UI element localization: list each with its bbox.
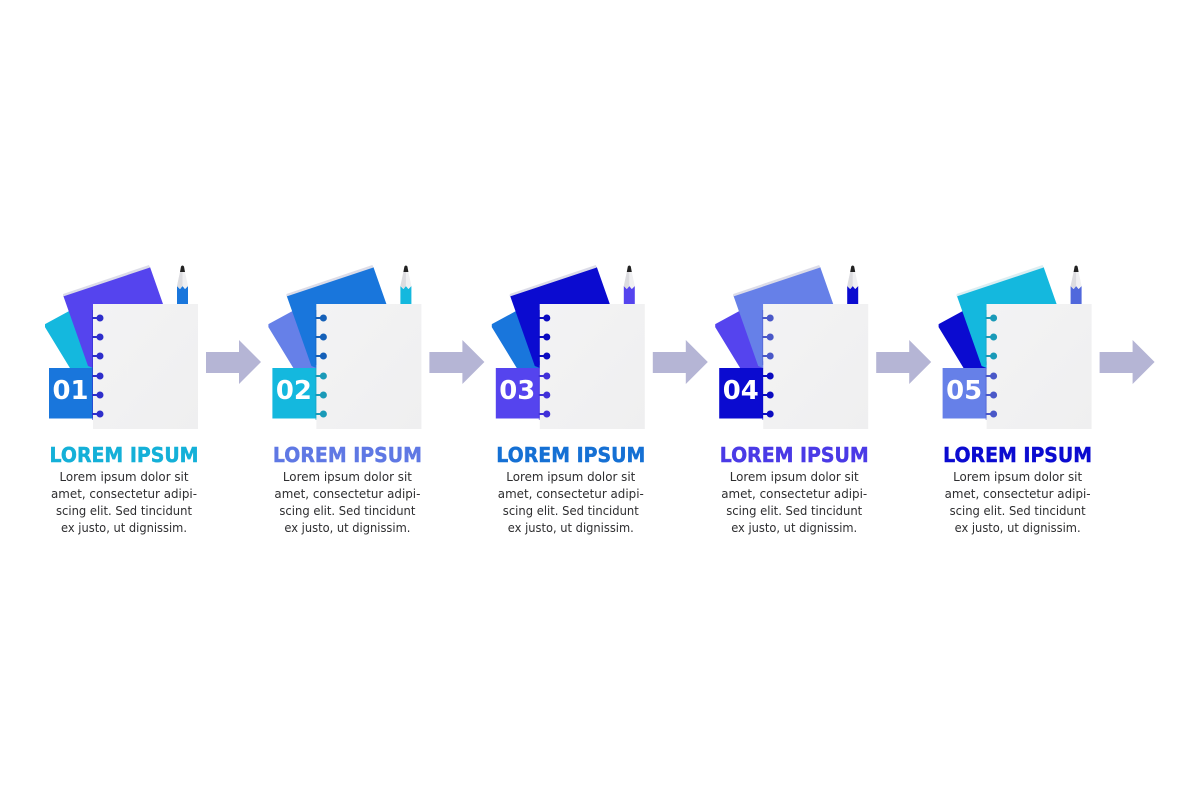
number badge (496, 368, 540, 418)
spiral binding (315, 310, 326, 420)
heading: LOREM IPSUM (273, 443, 422, 467)
body text: Lorem ipsum dolor sit (953, 469, 1082, 484)
body text (945, 469, 1091, 535)
number badge: 03 (499, 376, 535, 406)
body text: amet, consectetur adipi- (51, 486, 197, 501)
icon: pencil (177, 266, 188, 304)
icon: back notebook (269, 309, 318, 368)
notebook page (987, 304, 1092, 429)
body text: Lorem ipsum dolor sit (506, 469, 635, 484)
body text (274, 469, 420, 535)
body text: Lorem ipsum dolor sit (60, 469, 189, 484)
step 4 (716, 265, 931, 535)
spiral binding (986, 310, 997, 420)
spiral binding (92, 310, 103, 420)
number badge: 02 (276, 376, 312, 406)
heading: LOREM IPSUM (496, 443, 645, 467)
body text: amet, consectetur adipi- (498, 486, 644, 501)
icon: front notebook (63, 265, 163, 368)
heading: LOREM IPSUM (720, 443, 869, 467)
body text: amet, consectetur adipi- (274, 486, 420, 501)
heading: LOREM IPSUM (943, 443, 1092, 467)
body text: ex justo, ut dignissim. (508, 520, 634, 535)
arrow (206, 340, 261, 384)
icon: front notebook (286, 265, 386, 368)
step 3 (492, 265, 708, 535)
icon: pencil (400, 266, 411, 304)
notebook page (540, 304, 645, 429)
body text: ex justo, ut dignissim. (61, 520, 187, 535)
body text: ex justo, ut dignissim. (284, 520, 410, 535)
icon: pencil (847, 266, 858, 304)
icon: back notebook (492, 309, 542, 368)
body text: scing elit. Sed tincidunt (56, 503, 192, 518)
icon: pencil (1071, 266, 1082, 304)
body text: ex justo, ut dignissim. (955, 520, 1081, 535)
step 2 (269, 265, 484, 535)
arrow (1100, 340, 1155, 384)
body text (721, 469, 867, 535)
icon: back notebook (939, 309, 989, 368)
number badge (49, 368, 93, 418)
notebook page (93, 304, 198, 429)
body text: scing elit. Sed tincidunt (726, 503, 862, 518)
number badge: 05 (946, 376, 982, 406)
body text: scing elit. Sed tincidunt (950, 503, 1086, 518)
icon: pencil (624, 266, 635, 304)
body text: Lorem ipsum dolor sit (283, 469, 412, 484)
arrow (429, 340, 484, 384)
step 1 (46, 265, 261, 535)
notebook page (763, 304, 868, 429)
body text: scing elit. Sed tincidunt (279, 503, 415, 518)
arrow (653, 340, 708, 384)
icon: front notebook (733, 265, 833, 368)
notebook page (316, 304, 421, 429)
arrow (876, 340, 931, 384)
body text: amet, consectetur adipi- (945, 486, 1091, 501)
icon: front notebook (957, 265, 1057, 368)
body text: scing elit. Sed tincidunt (503, 503, 639, 518)
number badge: 04 (723, 376, 759, 406)
icon: back notebook (46, 309, 95, 368)
number badge (719, 368, 763, 418)
icon: back notebook (716, 309, 765, 368)
body text: amet, consectetur adipi- (721, 486, 867, 501)
body text: ex justo, ut dignissim. (731, 520, 857, 535)
spiral binding (762, 310, 773, 420)
heading: LOREM IPSUM (50, 443, 198, 467)
spiral binding (539, 310, 550, 420)
number badge: 01 (52, 376, 88, 406)
step 5 (939, 265, 1155, 535)
number badge (272, 368, 316, 418)
body text (51, 469, 197, 535)
body text: Lorem ipsum dolor sit (730, 469, 859, 484)
number badge (943, 368, 987, 418)
icon: front notebook (510, 265, 610, 368)
body text (498, 469, 644, 535)
